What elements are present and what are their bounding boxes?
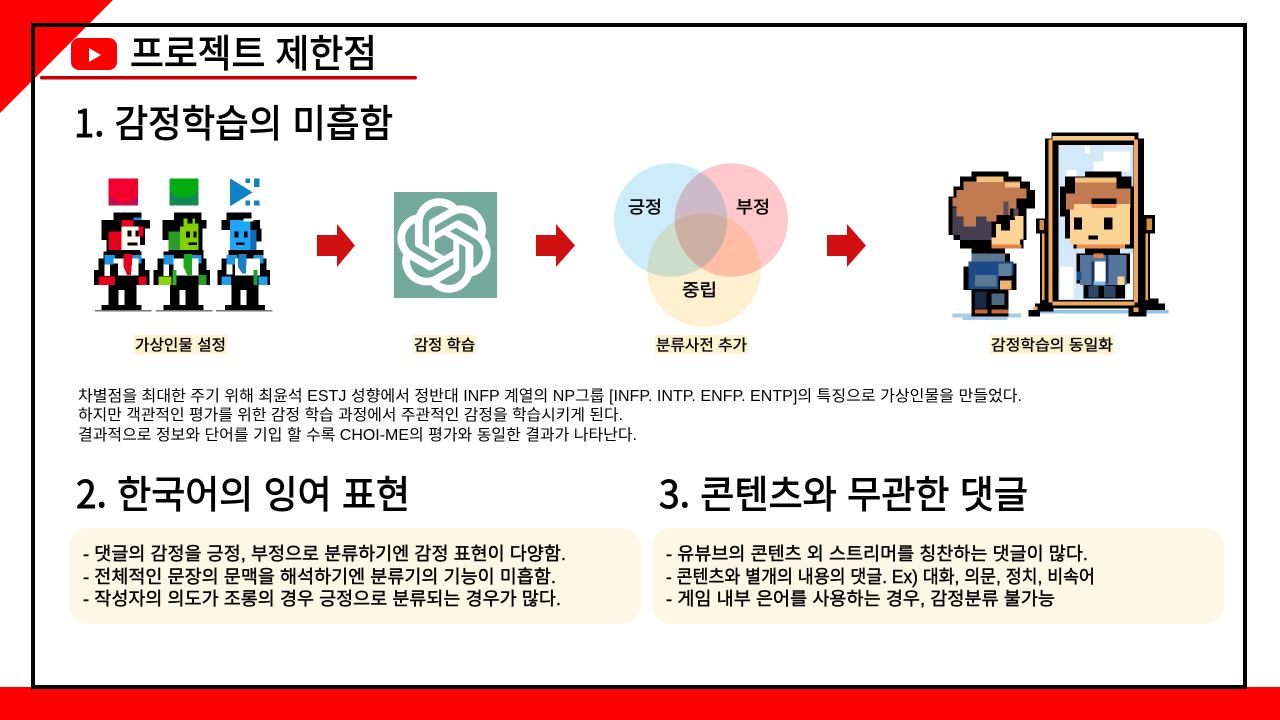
label: 분류사전 추가: 분류사전 추가	[656, 337, 747, 354]
heading: section 2: 2. 한국어의 잉여 표현	[76, 464, 410, 519]
text block: section 1 description: 차별점을 최대한 주기 위해 최윤석 ESTJ 성향에서 정반대 INFP 계열의 NP그룹 [INFP. INTP. ENFP. ENTP]의 특징으로 가상인물을 만들었다.	[78, 387, 1022, 405]
panel: section 3 notes: - 게임 내부 은어를 사용하는 경우, 감정분류 불가능	[666, 589, 1055, 609]
title: 프로젝트 제한점	[130, 23, 377, 78]
text block: section 1 description: 결과적으로 정보와 단어를 기입 할 수록 CHOI-ME의 평가와 동일한 결과가 나타난다.	[78, 426, 637, 444]
icon: green square	[169, 178, 199, 206]
bottom red bar	[0, 687, 1280, 720]
panel: section 3 notes: - 유뷰브의 콘텐츠 외 스트리머를 칭찬하는 댓글이 많다.	[666, 544, 1088, 564]
icon: youtube logo	[71, 38, 117, 70]
text block: section 1 description: 하지만 객관적인 평가를 위한 감정 학습 과정에서 주관적인 감정을 학습시키게 된다.	[78, 406, 623, 424]
reflected boy	[1060, 172, 1133, 298]
panel: section 2 notes	[69, 528, 641, 624]
label: 가상인물 설정: 가상인물 설정	[135, 337, 226, 354]
icon: red square	[109, 178, 138, 206]
venn diagram: 중립	[682, 281, 717, 300]
corner triangle	[0, 0, 113, 113]
venn diagram: 긍정	[628, 198, 662, 217]
boy seen from behind	[948, 172, 1035, 320]
illustration: three pixel personas	[94, 178, 273, 312]
mirror	[1028, 133, 1168, 317]
panel: section 2 notes: - 작성자의 의도가 조롱의 경우 긍정으로 분류되는 경우가 많다.	[83, 589, 561, 609]
icon: chatgpt logo tile	[394, 192, 497, 298]
persona: blue	[216, 212, 273, 312]
illustration: boy and mirror	[948, 133, 1168, 320]
heading: section 3: 3. 콘텐츠와 무관한 댓글	[659, 464, 1028, 519]
icon: blue play mark	[230, 178, 259, 206]
panel: section 3 notes	[652, 528, 1224, 624]
text block: section 1 description	[78, 387, 1022, 444]
panel: section 2 notes: - 전체적인 문장의 문맥을 해석하기엔 분류기의 기능이 미흡함.	[83, 567, 556, 587]
label: 감정학습의 동일화: 감정학습의 동일화	[991, 337, 1113, 354]
venn diagram	[614, 163, 788, 327]
heading: section 1: 1. 감정학습의 미흡함	[74, 93, 393, 148]
persona: green	[153, 212, 213, 312]
arrow 2	[536, 224, 575, 267]
arrow 3	[827, 224, 866, 267]
persona: red	[94, 212, 152, 312]
title underline	[40, 76, 417, 80]
venn diagram: 부정	[736, 198, 770, 217]
arrow 1	[317, 224, 355, 267]
panel: section 3 notes: - 콘텐츠와 별개의 내용의 댓글. Ex) 대화, 의문, 정치, 비속어	[666, 567, 1095, 587]
panel: section 2 notes: - 댓글의 감정을 긍정, 부정으로 분류하기엔 감정 표현이 다양함.	[83, 544, 566, 564]
label: 감정 학습: 감정 학습	[414, 337, 475, 354]
